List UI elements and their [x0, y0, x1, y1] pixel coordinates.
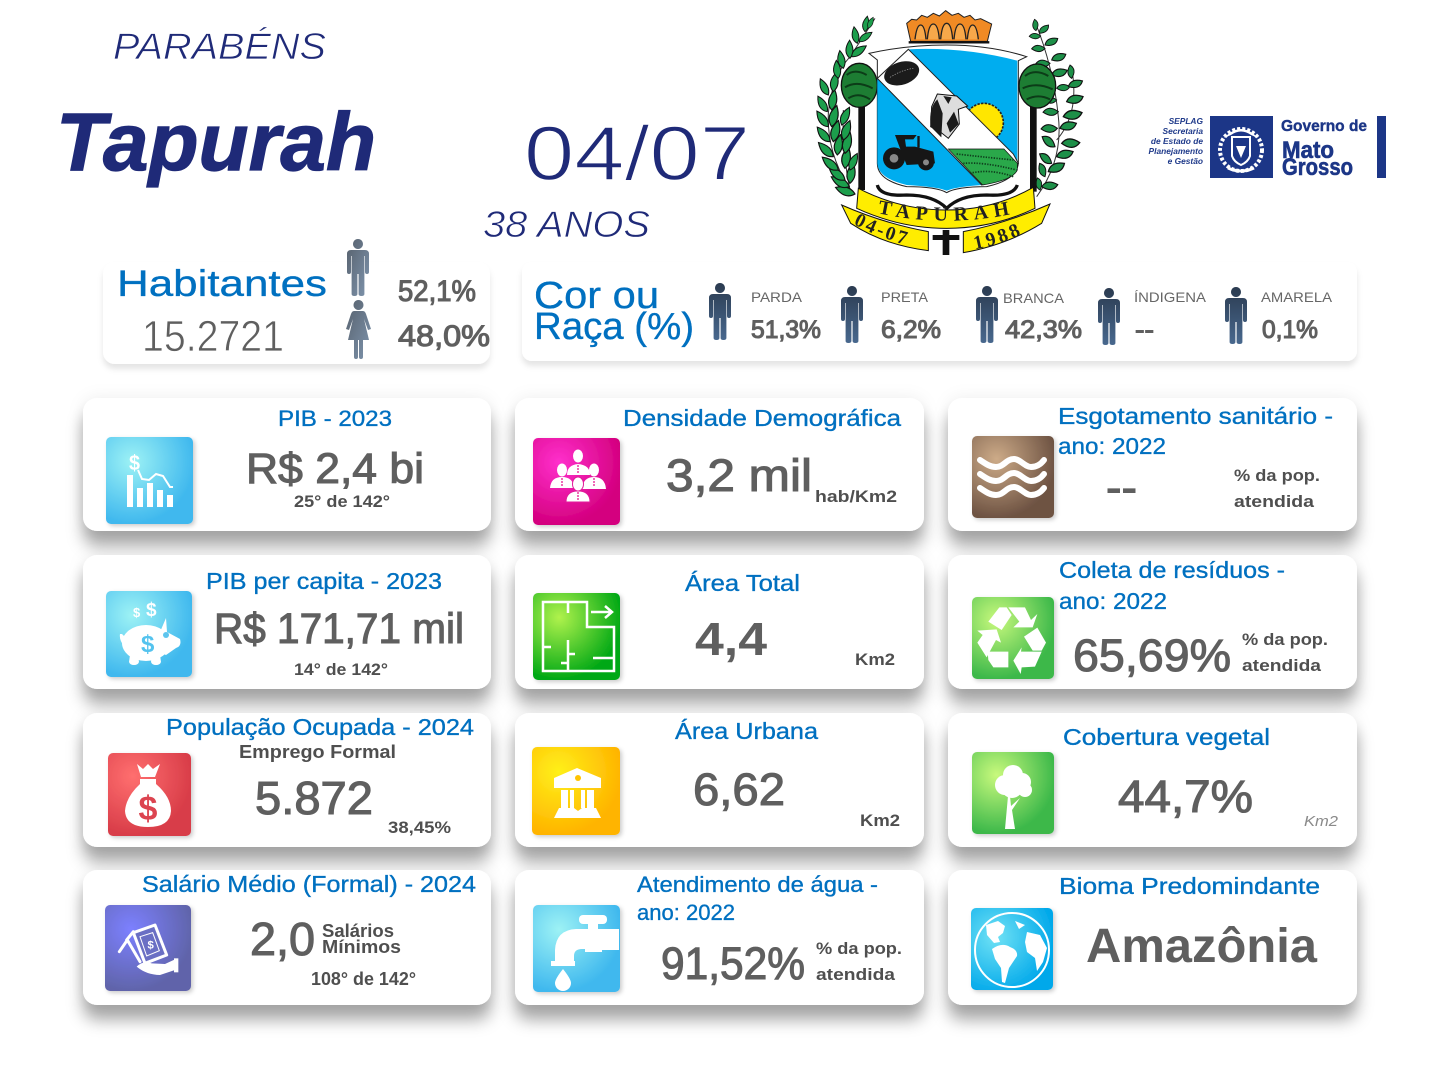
- sun: [965, 103, 1003, 142]
- title: ano: 2022: [1058, 433, 1166, 459]
- panel: PIB per capita: [83, 555, 491, 689]
- icon: money bag: [108, 753, 191, 836]
- panel: PIB: [83, 398, 491, 531]
- value: R$ 171,71 mil: [214, 605, 464, 653]
- icon: cash in hand: [105, 905, 191, 991]
- unit: % da pop.: [1234, 466, 1320, 485]
- title: Área Total: [685, 570, 800, 596]
- SEPLAG text block: e Gestão: [1168, 156, 1203, 166]
- value: 3,2 mil: [666, 450, 812, 501]
- unit: atendida: [1242, 656, 1322, 675]
- value: Amazônia: [1086, 920, 1317, 973]
- icon: man: [347, 239, 369, 296]
- title: Bioma Predomindante: [1059, 873, 1320, 899]
- ranking: 25° de 142°: [294, 492, 390, 511]
- panel: esgotamento sanitário: [948, 398, 1357, 531]
- Mato: Mato: [1282, 137, 1334, 164]
- group: parda: 51,3%: [751, 316, 821, 344]
- heading: PARABÉNS: PARABÉNS: [113, 26, 326, 67]
- unit: hab/Km2: [815, 487, 897, 506]
- icon: public building: [532, 747, 620, 835]
- unit: Salários: [322, 921, 394, 941]
- group: indígena: ÍNDIGENA: [1134, 289, 1207, 305]
- unit: % da pop.: [816, 939, 902, 958]
- group: branca: [976, 286, 1082, 344]
- title: Cobertura vegetal: [1063, 724, 1270, 750]
- shield: [869, 45, 1027, 208]
- unit: atendida: [816, 965, 896, 984]
- heading: Cor ou Raça: Cor ou: [534, 275, 659, 317]
- ribbon: TAPURAH: [856, 188, 1036, 229]
- male share: 52,1%: [398, 275, 476, 308]
- logo: SEPLAG Governo de Mato Grosso: [1149, 116, 1386, 181]
- shield base scroll: [877, 185, 1017, 208]
- trees: [841, 63, 1056, 192]
- corn plant left: [814, 16, 876, 199]
- title: Salário Médio (Formal) - 2024: [142, 871, 476, 897]
- state emblem: [1210, 116, 1273, 178]
- title: PIB per capita - 2023: [206, 568, 442, 594]
- group: preta: PRETA: [881, 289, 929, 305]
- crown: [907, 11, 992, 42]
- panel: densidade demográfica: [515, 398, 924, 531]
- icon: piggy bank: $: [141, 631, 155, 658]
- title: [637, 872, 878, 925]
- group: amarela: [1225, 287, 1333, 344]
- value: R$ 2,4 bi: [246, 445, 424, 493]
- title: [1058, 403, 1333, 459]
- unit: atendida: [1234, 492, 1315, 511]
- title: municipality name: Tapurah: [56, 97, 376, 188]
- ribbon: 04-07: [840, 204, 929, 252]
- side bar: [1377, 116, 1386, 178]
- panel: área total: [515, 555, 924, 689]
- ranking: 108° de 142°: [311, 969, 416, 989]
- title: Área Urbana: [675, 718, 818, 744]
- unit: [1242, 630, 1328, 675]
- icon: piggy bank: $: [133, 605, 141, 620]
- SEPLAG text block: de Estado de: [1151, 136, 1203, 146]
- value: 91,52%: [661, 938, 805, 989]
- subtitle: Emprego Formal: [239, 742, 396, 762]
- cross: [933, 230, 959, 255]
- group: amarela: AMARELA: [1261, 289, 1333, 305]
- icon: globe: [971, 908, 1053, 990]
- value: 44,7%: [1118, 771, 1253, 822]
- group: parda: PARDA: [751, 289, 803, 305]
- unit: Km2: [1304, 813, 1339, 830]
- title: Esgotamento sanitário -: [1058, 403, 1333, 429]
- icon: bar chart with dollar: [106, 437, 193, 524]
- anniversary date: 04/07: [524, 111, 750, 197]
- icon: floor plan: [533, 593, 620, 680]
- Grosso: Grosso: [1282, 154, 1353, 181]
- title: Densidade Demográfica: [623, 405, 901, 431]
- unit: [816, 939, 902, 984]
- cow head: [931, 94, 968, 138]
- icon: water tap: [533, 905, 620, 992]
- icon: bar chart with dollar: $: [129, 452, 140, 475]
- unit: Mínimos: [322, 937, 401, 957]
- ribbon: 1988: 1988: [974, 224, 1020, 249]
- panel: cobertura vegetal: [948, 713, 1357, 847]
- value: 2,0: [250, 913, 315, 965]
- value: 4,4: [695, 613, 767, 665]
- group: parda: [709, 283, 821, 344]
- title: [1059, 557, 1285, 614]
- panel: atendimento de água: [515, 870, 924, 1005]
- panel: habitantes: [103, 239, 490, 364]
- title: Coleta de resíduos -: [1059, 557, 1285, 583]
- female share: 48,0%: [398, 320, 490, 353]
- icon: people: [533, 438, 620, 525]
- ribbon: 04-07: 04-07: [856, 214, 908, 244]
- panel: salário médio: [83, 870, 491, 1005]
- ribbon: 1988: [962, 203, 1051, 254]
- icon: cash in hand: $: [148, 940, 155, 952]
- panel: população ocupada: [83, 713, 491, 847]
- group: preta: [841, 286, 941, 344]
- ranking: 14° de 142°: [294, 660, 388, 679]
- SEPLAG text block: Planejamento: [1149, 146, 1203, 156]
- panel: cor ou raça: [522, 262, 1357, 361]
- icon: money bag: $: [139, 790, 158, 828]
- unit: Km2: [860, 811, 900, 830]
- icon: tree: [972, 752, 1054, 834]
- unit: [1234, 466, 1320, 511]
- group: branca: BRANCA: [1003, 290, 1065, 306]
- ribbon: TAPURAH: TAPURAH: [880, 200, 1010, 221]
- group: amarela: 0,1%: [1262, 316, 1318, 344]
- unit: [322, 921, 401, 957]
- title: População Ocupada - 2024: [166, 714, 474, 740]
- share: 38,45%: [388, 818, 451, 837]
- icon: recycle: [972, 597, 1054, 679]
- group: indígena: [1098, 288, 1207, 345]
- value: 65,69%: [1073, 630, 1231, 681]
- title: Atendimento de água -: [637, 872, 878, 897]
- heading: Habitantes: Habitantes: [117, 263, 327, 304]
- heading: Cor ou Raça: [534, 275, 694, 348]
- value: 5.872: [255, 772, 373, 824]
- title: ano: 2022: [1059, 588, 1167, 614]
- unit: % da pop.: [1242, 630, 1328, 649]
- panel: área urbana: [515, 713, 924, 847]
- leafy branch right: [1029, 19, 1084, 197]
- group: preta: 6,2%: [881, 316, 941, 344]
- icon: waves: [972, 436, 1054, 518]
- title: ano: 2022: [637, 900, 735, 925]
- heading: Cor ou Raça: Raça (%): [534, 306, 694, 348]
- seed: [881, 57, 922, 90]
- group: branca: 42,3%: [1005, 316, 1082, 344]
- SEPLAG text block: [1149, 116, 1203, 166]
- title: PIB - 2023: [278, 406, 392, 431]
- panel: bioma: [948, 870, 1357, 1005]
- unit: Km2: [855, 650, 895, 669]
- age text: 38 ANOS: [483, 204, 650, 245]
- icon: woman: [346, 300, 371, 359]
- Governo de: Governo de: [1281, 118, 1367, 135]
- icon: municipal coat of arms: [816, 10, 1084, 255]
- icon: piggy bank: $: [146, 600, 157, 621]
- tractor: [883, 135, 935, 170]
- value: 6,62: [693, 764, 785, 815]
- panel: coleta de resíduos: [948, 555, 1357, 689]
- group: indígena: --: [1135, 316, 1154, 344]
- value: --: [1106, 462, 1137, 513]
- field: [948, 149, 1017, 185]
- population value: 15.2721: [142, 312, 284, 361]
- icon: piggy bank: [106, 591, 192, 677]
- SEPLAG text block: Secretaria: [1162, 126, 1203, 136]
- SEPLAG text block: SEPLAG: [1169, 116, 1203, 126]
